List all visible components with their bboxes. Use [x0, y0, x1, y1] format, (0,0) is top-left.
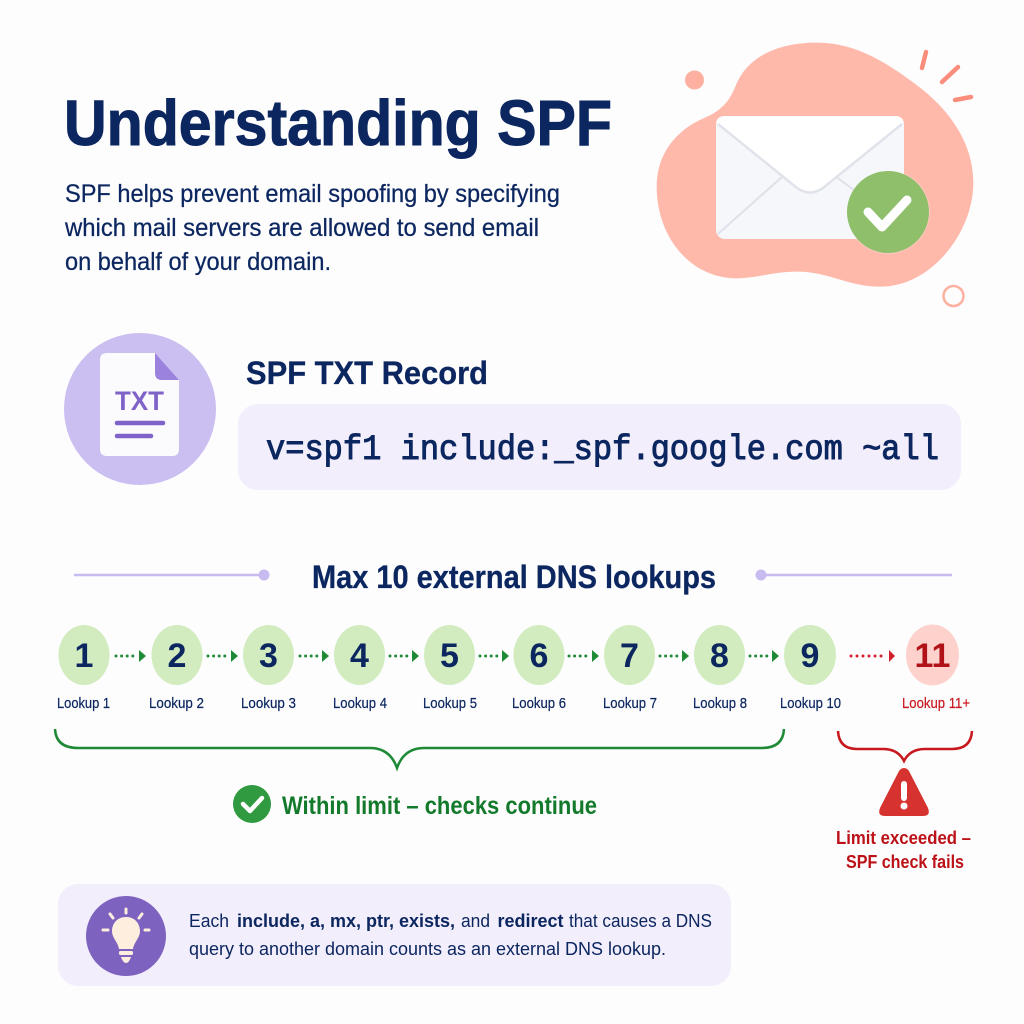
arrow 8 to 9	[750, 650, 779, 662]
icon: green check	[233, 785, 271, 823]
lookup 1: 1	[75, 637, 93, 675]
arrow 4 to 5	[390, 650, 419, 662]
lookup 3	[241, 625, 296, 712]
lookup 7	[603, 625, 657, 712]
limit exceeded text	[836, 828, 971, 872]
within limit text: Within limit – checks continue	[282, 792, 597, 820]
pink blob	[657, 43, 973, 287]
illustration: verified email	[657, 43, 973, 306]
lookup 8	[693, 625, 747, 712]
icon: warning triangle	[879, 768, 929, 816]
code panel: v=spf1 include:_spf.google.com ~all	[266, 430, 939, 470]
arrow 6 to 7	[569, 650, 599, 662]
intro text block: SPF helps prevent email spoofing by specifying	[65, 180, 560, 208]
lookup 7: 7	[620, 637, 639, 675]
arrow 1 to 2	[116, 650, 146, 662]
lookup 3: Lookup 3	[241, 696, 296, 712]
lookup 2: Lookup 2	[149, 696, 204, 712]
arrow 3 to 4	[300, 650, 329, 662]
lookup 8: Lookup 8	[693, 696, 747, 712]
lookup 11+: 11	[915, 637, 950, 675]
lookup 10 (drawn as 9)	[780, 625, 841, 712]
decorative ring	[944, 286, 964, 306]
red arrow to 11	[851, 650, 895, 662]
lookup 6	[512, 625, 566, 712]
section heading: DNS limit: Max 10 external DNS lookups	[312, 559, 716, 595]
decorative dot	[685, 70, 704, 90]
red brace	[838, 731, 972, 761]
lookup 7: Lookup 7	[603, 696, 657, 712]
icon: TXT document	[64, 333, 216, 485]
info text	[189, 911, 712, 959]
lookup 5: Lookup 5	[423, 696, 477, 712]
info text: redirect	[498, 911, 564, 931]
lookup 10 (drawn as 9): 9	[801, 637, 819, 675]
green check badge	[846, 170, 930, 254]
envelope	[716, 116, 904, 239]
heading: SPF TXT Record: SPF TXT Record	[246, 355, 488, 391]
lookup 5	[423, 625, 477, 712]
arrow 5 to 6	[480, 650, 509, 662]
title: Understanding SPF	[64, 87, 612, 159]
arrow 2 to 3	[208, 650, 238, 662]
info panel	[58, 884, 731, 986]
limit exceeded text: SPF check fails	[846, 852, 964, 872]
status: within limit	[233, 785, 597, 823]
info text: and	[461, 911, 490, 931]
info text: that causes a DNS	[569, 911, 712, 931]
lookup 2	[149, 625, 204, 712]
icon: TXT document: TXT	[115, 386, 164, 416]
lookup 11+	[902, 624, 970, 712]
icon: light bulb	[86, 896, 166, 976]
limit exceeded text: Limit exceeded –	[836, 828, 971, 848]
intro text block	[64, 180, 560, 276]
lookup 5: 5	[440, 637, 459, 675]
info text: Each	[189, 911, 229, 931]
lookup 10 (drawn as 9): Lookup 10	[780, 696, 841, 712]
lookup 6: Lookup 6	[512, 696, 566, 712]
intro text block: which mail servers are allowed to send email	[64, 214, 539, 242]
lookup 4: Lookup 4	[333, 696, 387, 712]
lookup 1: Lookup 1	[57, 696, 110, 712]
lookup 3: 3	[259, 637, 278, 675]
lookup 1	[57, 625, 110, 712]
lookup 4	[333, 625, 387, 712]
lookup chain	[57, 624, 970, 712]
section heading: DNS limit	[74, 559, 952, 595]
info text: query to another domain counts as an external DNS lookup.	[189, 939, 666, 959]
lookup 8: 8	[710, 637, 729, 675]
arrow 7 to 8	[660, 650, 689, 662]
green brace	[55, 729, 784, 768]
lookup 6: 6	[530, 637, 548, 675]
info text: include, a, mx, ptr, exists,	[237, 911, 455, 931]
lookup 4: 4	[350, 637, 369, 675]
intro text block: on behalf of your domain.	[65, 248, 331, 276]
sparkle lines	[922, 52, 971, 100]
lookup 11+: Lookup 11+	[902, 696, 970, 712]
lookup 2: 2	[168, 637, 186, 675]
code panel	[238, 404, 961, 490]
